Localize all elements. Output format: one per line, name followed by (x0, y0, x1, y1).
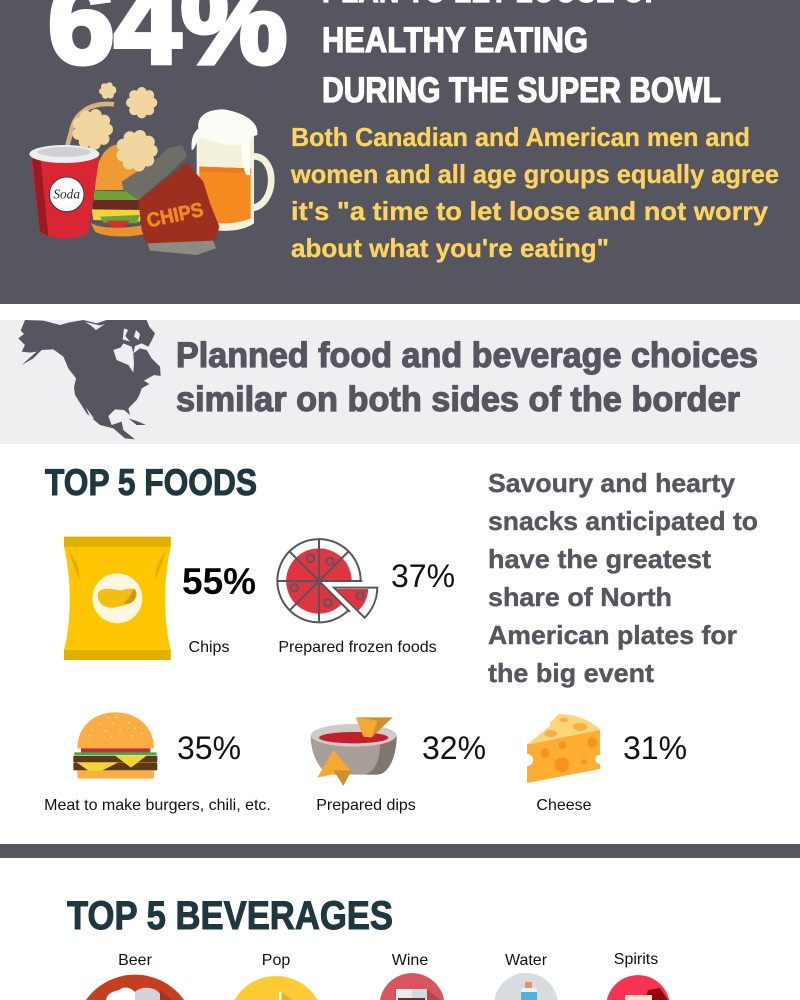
label: wine: Wine (392, 952, 428, 969)
beverage: pop (234, 952, 318, 1000)
food item: chips (64, 537, 256, 660)
icon: hamburger (73, 712, 157, 779)
label: cheese: Cheese (536, 797, 592, 814)
food item: prepared frozen foods (277, 539, 455, 656)
stat: cheese percentage: 31% (623, 730, 687, 766)
subheading: Planned food and beverage choices (176, 336, 758, 375)
label: chips: Chips (189, 639, 229, 656)
icon: popcorn pieces (78, 85, 152, 165)
icon: pizza (277, 539, 377, 623)
text block: savoury snacks: have the greatest (488, 544, 711, 574)
icon: soda cup: Soda (53, 186, 80, 201)
icon: chips bag (122, 145, 219, 255)
icon: water circle (494, 973, 558, 1000)
stat: chips percentage: 55% (182, 561, 256, 602)
subheading (176, 336, 758, 419)
icon: spirits circle (607, 975, 669, 1000)
icon: dip bowl with chips (311, 717, 397, 786)
hero headline: HEALTHY EATING (322, 21, 588, 60)
heading: top 5 beverages: TOP 5 BEVERAGES (67, 894, 393, 938)
label: water: Water (505, 952, 548, 969)
subheading: similar on both sides of the border (176, 380, 740, 419)
hero description: about what you're eating" (291, 233, 609, 263)
label: beer: Beer (118, 952, 153, 969)
hero description: it's "a time to let loose and not worry (291, 196, 769, 226)
beverage: beer (86, 952, 184, 1000)
stat: frozen foods percentage: 37% (391, 558, 455, 594)
icon: pop circle (234, 976, 318, 1000)
icon: chips bag: CHIPS (145, 199, 205, 232)
icon: soda cup (29, 104, 114, 239)
beverage: water (494, 952, 558, 1000)
panel: subheading band (0, 320, 800, 444)
icon: beer circle (86, 975, 184, 1000)
beverage: spirits (607, 951, 669, 1000)
panel: hero (0, 0, 800, 304)
label: frozen foods: Prepared frozen foods (278, 639, 437, 656)
label: pop: Pop (262, 952, 290, 969)
text block: savoury snacks: snacks anticipated to (488, 506, 758, 536)
hero description (290, 122, 779, 263)
hero description: women and all age groups equally agree (290, 159, 779, 189)
icon: burger (91, 144, 148, 237)
icon: cheese wedge (521, 714, 605, 783)
hero headline (322, 0, 721, 110)
stat: meat percentage: 35% (177, 730, 241, 766)
food item: cheese (521, 714, 687, 814)
stat: dips percentage: 32% (422, 730, 486, 766)
text block: savoury snacks: American plates for (488, 620, 737, 650)
illustration: snacks and drinks (29, 85, 271, 255)
icon: beer mug (192, 109, 271, 231)
heading: top 5 foods: TOP 5 FOODS (45, 462, 257, 503)
hero headline: DURING THE SUPER BOWL (322, 71, 721, 110)
text block: savoury snacks (488, 468, 758, 688)
icon: chip bag (64, 537, 171, 660)
icon: wine circle (380, 973, 444, 1000)
food item: meat (44, 712, 271, 814)
icon: North America map (18, 320, 161, 439)
text block: savoury snacks: the big event (488, 658, 654, 688)
label: spirits: Spirits (614, 951, 658, 968)
food item: prepared dips (311, 717, 486, 814)
label: meat: Meat to make burgers, chili, etc. (44, 797, 271, 814)
divider bar (0, 844, 800, 858)
label: dips: Prepared dips (316, 797, 416, 814)
text block: savoury snacks: Savoury and hearty (488, 468, 736, 498)
beverage: wine (380, 952, 444, 1000)
hero description: Both Canadian and American men and (291, 122, 750, 152)
text block: savoury snacks: share of North (488, 582, 672, 612)
